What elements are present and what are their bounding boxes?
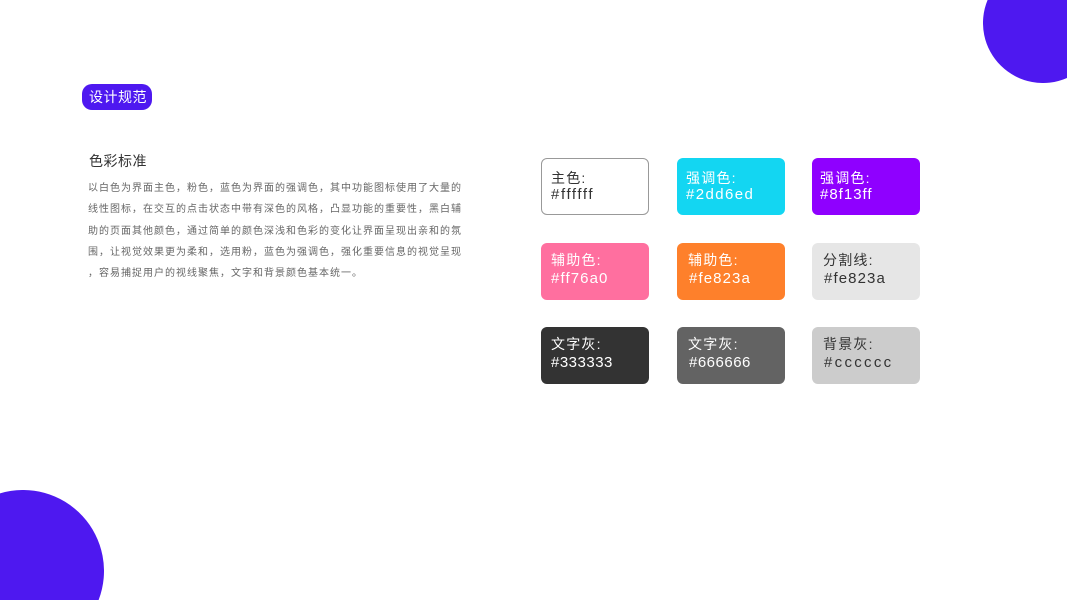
swatch: secondary orange: 辅助色:	[688, 252, 739, 268]
body text block: 助的页面其他颜色，通过简单的颜色深浅和色彩的变化让界面呈现出亲和的氛	[88, 226, 462, 237]
swatch: text mid grey: #666666	[689, 354, 751, 371]
heading badge: 设计规范	[89, 89, 147, 105]
swatch: accent purple	[812, 158, 920, 215]
swatch: primary white	[541, 158, 649, 215]
swatch: primary white: #ffffff	[551, 186, 594, 203]
swatch: accent cyan: 强调色:	[686, 170, 737, 186]
swatch: background grey: 背景灰:	[823, 336, 874, 352]
body text block: ，容易捕捉用户的视线聚焦，文字和背景颜色基本统一。	[88, 268, 363, 279]
body text block: 以白色为界面主色，粉色，蓝色为界面的强调色，其中功能图标使用了大量的	[88, 183, 462, 194]
body text block: 线性图标，在交互的点击状态中带有深色的风格，凸显功能的重要性，黑白辅	[88, 204, 462, 215]
swatch: text dark grey	[541, 327, 649, 384]
swatch: secondary pink	[541, 243, 649, 300]
swatch: text mid grey: 文字灰:	[688, 336, 739, 352]
swatch: text dark grey: #333333	[551, 354, 613, 371]
swatch: accent purple: 强调色:	[820, 170, 871, 186]
swatch: accent purple: #8f13ff	[820, 186, 873, 203]
swatch: divider grey: #fe823a	[824, 270, 886, 287]
swatch: divider grey: 分割线:	[823, 252, 874, 268]
decorative circle: top right	[983, 0, 1067, 83]
swatch: secondary orange: #fe823a	[689, 270, 751, 287]
section title: 色彩标准	[89, 153, 147, 169]
heading badge	[82, 84, 152, 110]
swatch: accent cyan	[677, 158, 785, 215]
body text block	[88, 182, 462, 279]
swatch: accent cyan: #2dd6ed	[686, 186, 754, 203]
swatch: text mid grey	[677, 327, 785, 384]
swatch: text dark grey: 文字灰:	[551, 336, 602, 352]
swatch: secondary pink: 辅助色:	[551, 252, 602, 268]
decorative circle: bottom left	[0, 490, 104, 600]
swatch: background grey: #cccccc	[824, 354, 893, 371]
swatch: divider grey	[812, 243, 920, 300]
swatch: primary white: 主色:	[551, 170, 586, 186]
swatch: secondary orange	[677, 243, 785, 300]
swatch: secondary pink: #ff76a0	[551, 270, 608, 287]
body text block: 围，让视觉效果更为柔和，选用粉，蓝色为强调色，强化重要信息的视觉呈现	[88, 247, 462, 258]
swatch: background grey	[812, 327, 920, 384]
